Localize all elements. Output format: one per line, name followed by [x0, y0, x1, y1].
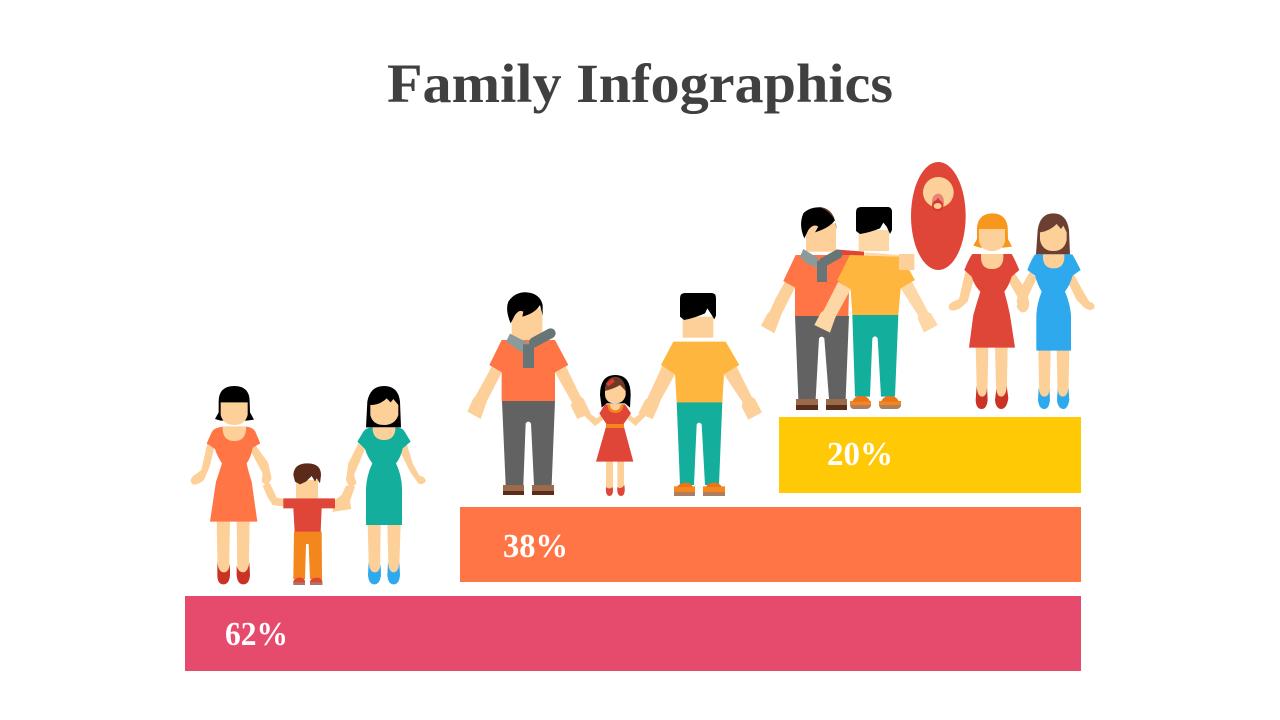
woman in red dress [949, 213, 1029, 409]
bar: 38% [460, 507, 1081, 582]
baby in red swaddle [911, 162, 966, 270]
bar: 62% [185, 596, 1081, 671]
title: Family Infographics [387, 53, 893, 114]
boy in red shirt [263, 463, 355, 585]
family group 3: couple of men, baby, couple of women [761, 162, 1095, 410]
man with scarf [761, 207, 864, 410]
family group 2: father, daughter, father [467, 292, 762, 496]
man in yellow shirt [814, 207, 938, 409]
label: 20%: 20% [827, 436, 893, 473]
scarf [800, 249, 838, 282]
woman in orange dress [191, 386, 272, 584]
label: 38%: 38% [503, 528, 568, 565]
family group 1: mother, son, mother [191, 386, 426, 585]
bar: 20% [779, 417, 1081, 493]
label: 62%: 62% [225, 616, 288, 653]
scarf [506, 333, 551, 368]
woman in blue dress [1017, 213, 1095, 409]
man with scarf [467, 292, 591, 495]
man in yellow shirt [638, 293, 762, 496]
girl in red dress [582, 375, 648, 496]
woman in teal dress [346, 386, 426, 584]
